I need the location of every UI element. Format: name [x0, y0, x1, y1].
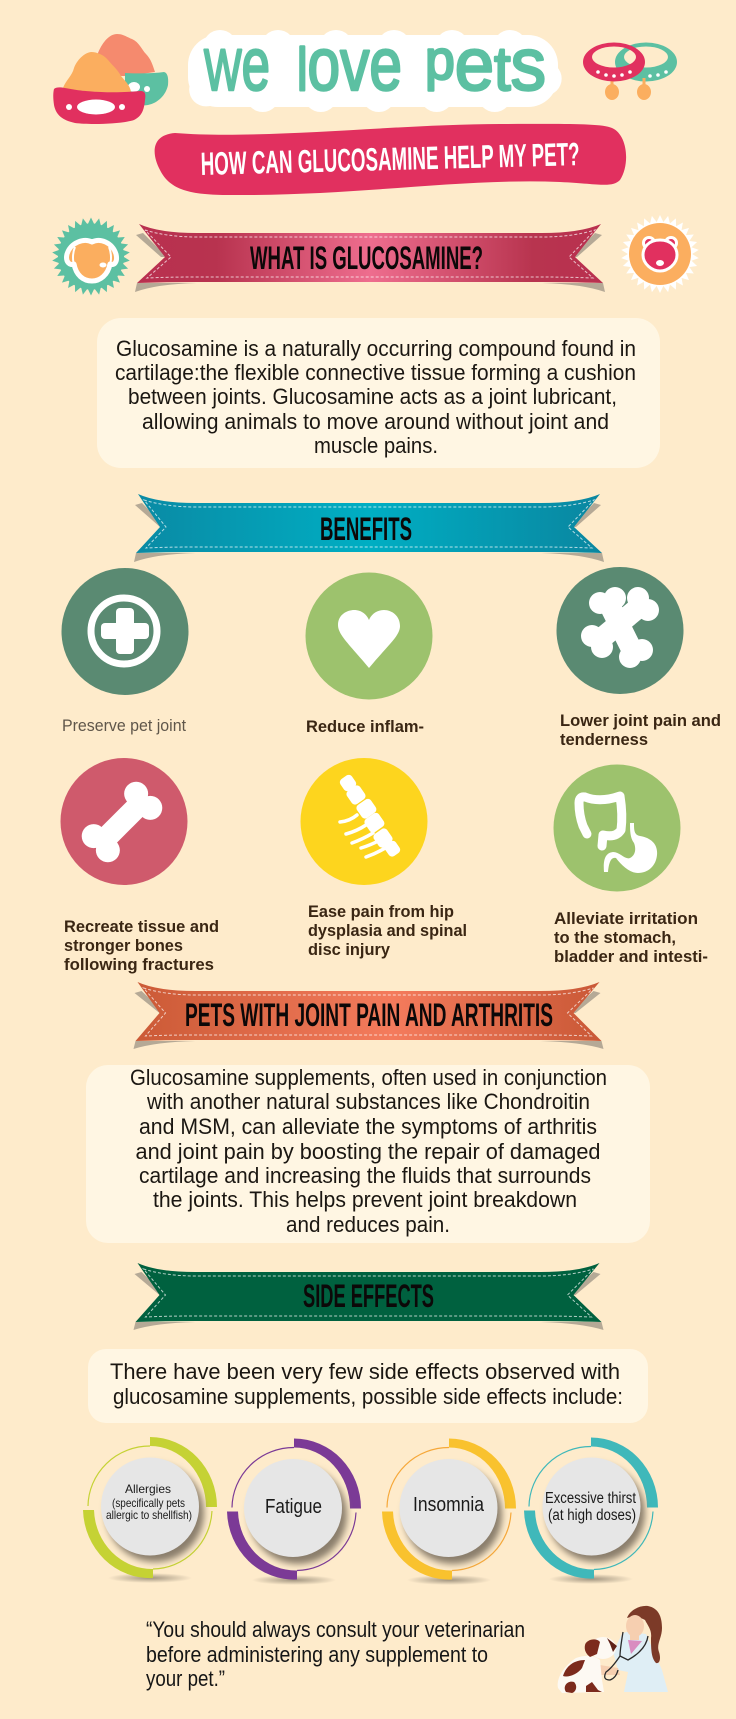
label: recreate tissue	[64, 918, 219, 974]
quote: your pet.”	[146, 1666, 225, 1691]
icon: collars	[583, 42, 677, 100]
ribbon: what is glucosamine	[135, 224, 605, 292]
side effect: excessive thirst: Excessive thirst	[545, 1490, 637, 1507]
ribbon: benefits	[134, 494, 604, 562]
side effect: fatigue: Fatigue	[265, 1496, 322, 1518]
label: lower joint pain	[560, 712, 721, 749]
subtitle banner	[155, 124, 626, 195]
text panel: definition	[97, 318, 660, 468]
side effect: insomnia	[382, 1438, 516, 1585]
quote: before administering any supplement to	[146, 1642, 488, 1667]
text panel: side effects intro: There have been very few side effects observed with	[110, 1359, 620, 1384]
side effect: insomnia: Insomnia	[413, 1494, 485, 1516]
label: reduce inflammation: Reduce inflam-	[306, 718, 424, 736]
icon: bear badge	[617, 211, 703, 297]
icon: heart	[306, 572, 432, 700]
text panel: arthritis: and joint pain by boosting the repair of damaged	[136, 1139, 600, 1164]
text panel: arthritis: and reduces pain.	[286, 1212, 450, 1237]
title: love	[297, 23, 427, 106]
ribbon title: PETS WITH JOINT PAIN AND ARTHRITIS	[185, 998, 553, 1034]
icon: bone	[60, 758, 188, 885]
text panel: arthritis	[86, 1065, 650, 1243]
title: p	[425, 28, 455, 91]
label: lower joint pain: Lower joint pain and	[560, 712, 721, 730]
title cloud	[188, 23, 558, 107]
icon: crossed bones	[556, 567, 684, 694]
ribbon title: WHAT IS GLUCOSAMINE?	[250, 241, 483, 277]
text panel: arthritis: cartilage and increasing the fluids that surrounds	[139, 1163, 591, 1188]
label: recreate tissue: Recreate tissue and	[64, 918, 219, 936]
text panel: definition: Glucosamine is a naturally occurring compound found in	[116, 336, 636, 361]
icon: digestive system	[554, 764, 680, 892]
ribbon: pets with joint pain	[134, 982, 604, 1049]
text panel: definition: between joints. Glucosamine acts as a joint lubricant,	[128, 384, 617, 409]
text panel: arthritis: with another natural substances like Chondroitin	[146, 1089, 590, 1114]
title: We	[204, 23, 283, 106]
quote: “You should always consult your veterinarian	[146, 1617, 525, 1642]
side effect: allergies: Allergies	[125, 1482, 171, 1496]
text panel: definition: cartilage:the flexible connective tissue forming a cushion	[115, 360, 636, 385]
icon: dog badge	[48, 213, 134, 300]
label: preserve pet joint: Preserve pet joint	[62, 716, 186, 735]
ribbon: side effects	[134, 1263, 604, 1330]
side effect: excessive thirst	[524, 1438, 658, 1584]
text panel: side effects intro: glucosamine supplements, possible side effects include:	[113, 1384, 623, 1409]
side effect: allergies: (specifically pets	[112, 1496, 185, 1510]
label: ease pain: Ease pain from hip	[308, 903, 454, 921]
side effect: allergies: allergic to shellfish)	[106, 1508, 192, 1522]
text panel: arthritis: the joints. This helps prevent joint breakdown	[153, 1187, 577, 1212]
label: ease pain: disc injury	[308, 941, 391, 959]
text panel: definition: muscle pains.	[314, 433, 438, 458]
icon: medical cross	[62, 568, 188, 695]
label: alleviate irritation: bladder and intesti-	[554, 948, 708, 966]
label: ease pain: dysplasia and spinal	[308, 922, 467, 940]
label: lower joint pain: tenderness	[560, 731, 648, 749]
label: alleviate irritation: to the stomach,	[554, 929, 676, 947]
label: recreate tissue: stronger bones	[64, 937, 183, 955]
subtitle: HOW CAN GLUCOSAMINE HELP MY PET?	[200, 137, 580, 183]
label: recreate tissue: following fractures	[64, 956, 214, 974]
label: ease pain	[308, 903, 467, 959]
title: e	[455, 23, 494, 106]
icon: food bowls	[53, 34, 168, 124]
text panel: arthritis: and MSM, can alleviate the symptoms of arthritis	[139, 1114, 597, 1139]
label: alleviate irritation: Alleviate irritation	[554, 910, 698, 928]
text panel: arthritis: Glucosamine supplements, often used in conjunction	[130, 1065, 607, 1090]
side effect: allergies	[83, 1437, 217, 1583]
ribbon title: BENEFITS	[320, 512, 412, 548]
quote	[146, 1617, 525, 1691]
label: alleviate irritation	[554, 910, 708, 966]
side effect: fatigue	[227, 1438, 361, 1585]
text panel: definition: allowing animals to move around without joint and	[142, 409, 609, 434]
side effect: excessive thirst: (at high doses)	[548, 1507, 636, 1524]
title: ts	[494, 23, 548, 106]
illustration: vet and dog	[558, 1606, 668, 1693]
icon: spine	[300, 758, 428, 885]
text panel: side effects intro	[88, 1349, 648, 1423]
ribbon title: SIDE EFFECTS	[303, 1279, 434, 1315]
